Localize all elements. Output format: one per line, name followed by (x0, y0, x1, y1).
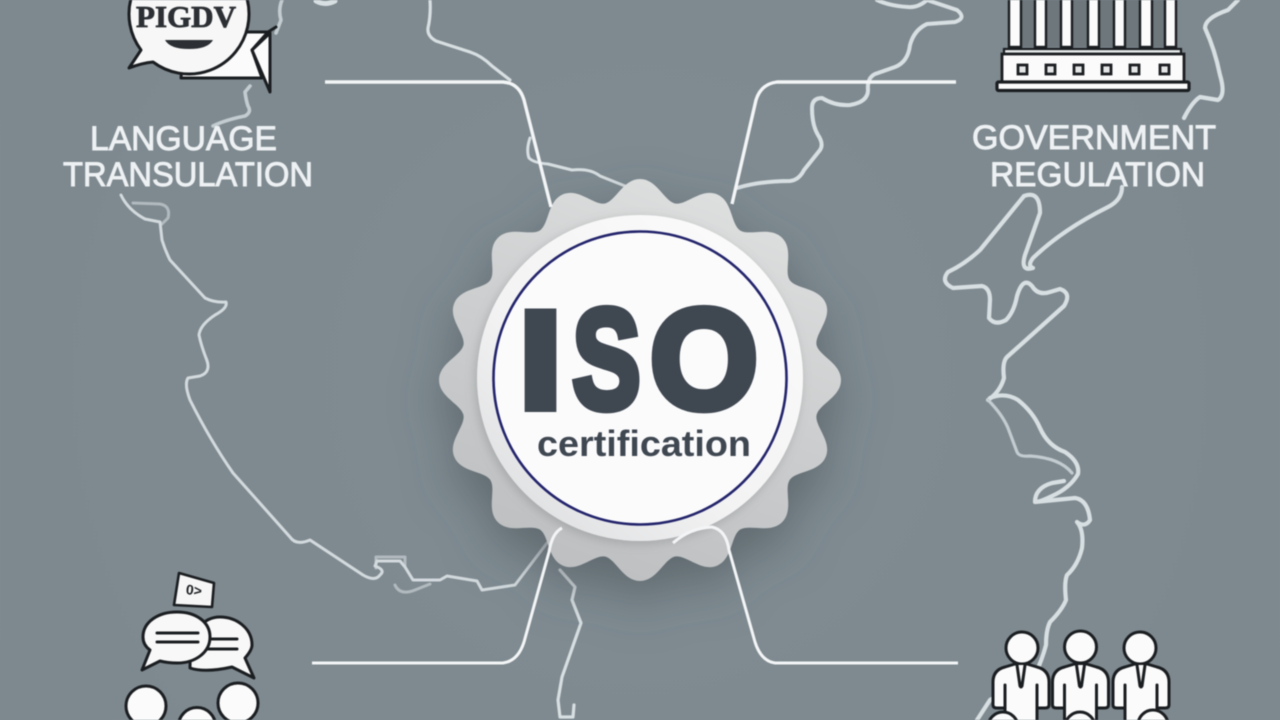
connector: bottom right (673, 527, 958, 663)
icon: code tag (174, 573, 214, 607)
seal: ISO wordmark: O (650, 280, 758, 438)
icon: building plinth (997, 82, 1189, 90)
map outline: upper right coast (737, 0, 962, 188)
connector: top left (325, 82, 551, 207)
seal: outer white disc (477, 215, 803, 541)
map outline: northern border over the seal (528, 138, 630, 188)
map outline: upper left coast (428, 0, 510, 80)
label: language translation: TRANSULATION (63, 156, 313, 194)
seal: ISO wordmark: I (514, 279, 567, 442)
seal: ISO wordmark (514, 279, 758, 442)
icon: back speech bubble (190, 617, 254, 678)
icon: person one (993, 632, 1049, 720)
icon: front speech bubble (142, 612, 210, 670)
icon: language speech bubbles (129, 0, 276, 92)
icon: building shaded gaps (1022, 0, 1164, 47)
icon: round speech bubble (129, 0, 249, 74)
icon: conversation group (126, 573, 258, 720)
icon: front row heads (988, 710, 1168, 720)
icon: bubble dash (165, 40, 213, 49)
label: government regulation (972, 119, 1216, 194)
seal: inner white field with navy ring (494, 232, 786, 524)
icon: building cornice (1004, 49, 1181, 54)
seal badge (430, 170, 850, 595)
seal: scalloped gear (430, 170, 850, 595)
icon: glyph text in bubble: PIGDV (136, 0, 237, 34)
icon: building columns (1009, 0, 1176, 47)
icon: government building (997, 0, 1189, 90)
icon: code tag: 0> (185, 581, 203, 599)
icon: building base (1002, 54, 1184, 82)
connector: bottom left (312, 528, 562, 663)
label: government regulation: REGULATION (990, 156, 1205, 194)
seal: ISO wordmark: S (572, 281, 641, 439)
map outline: left coast (121, 195, 547, 592)
seal: certification caption: certification (537, 423, 751, 464)
icon: building windows (1018, 65, 1169, 74)
map outline: right coast inner branch (988, 400, 1072, 473)
label: language translation (63, 120, 313, 194)
map outline: bottom coast (558, 570, 581, 717)
icon: person two (1052, 631, 1108, 720)
label: government regulation: GOVERNMENT (972, 119, 1216, 157)
icon: person three (1113, 632, 1169, 720)
map outline: road beside the speech bubble (213, 0, 282, 126)
icon: envelope-shaped bubble (181, 27, 276, 92)
map outline: right coast (945, 187, 1122, 720)
label: language translation: LANGUAGE (90, 120, 277, 158)
connector: top right (732, 82, 956, 204)
icon: people heads (126, 683, 258, 720)
map outline: far top right coast (1184, 0, 1238, 118)
map outline: blob at top (316, 1, 335, 4)
icon: team of people (988, 631, 1169, 720)
